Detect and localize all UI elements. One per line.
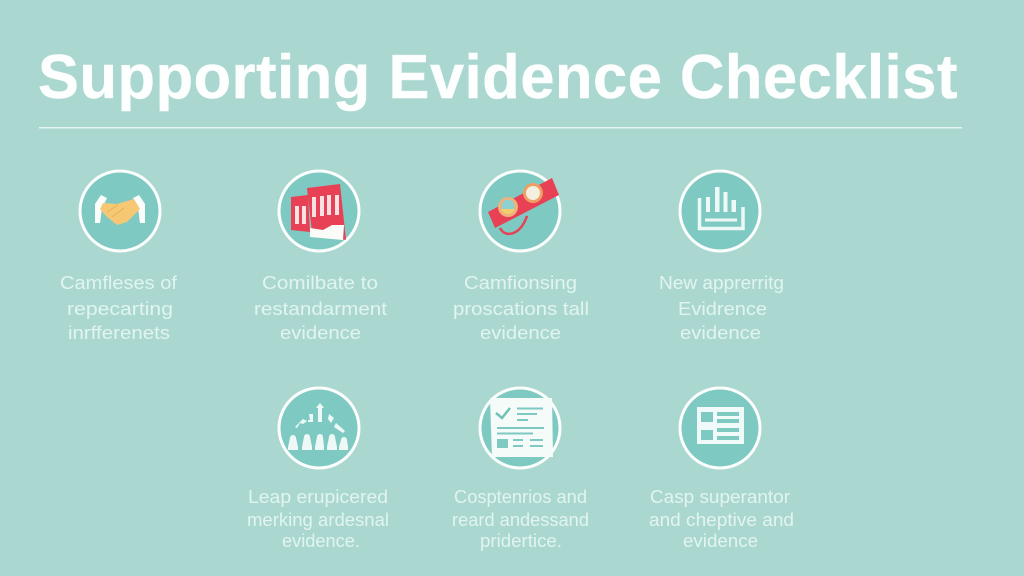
item 4: bar chart (659, 171, 784, 343)
label: item 6: pridertice. (480, 531, 562, 551)
label: item 6 (452, 487, 589, 551)
label: item 5: evidence. (282, 531, 360, 551)
label: item 2: evidence (280, 323, 361, 343)
label: item 3: Camfionsing (464, 273, 577, 293)
label: item 3: evidence (480, 323, 561, 343)
label: item 5 (247, 487, 389, 551)
title: Supporting Evidence Checklist (38, 43, 958, 112)
label: item 4: Evidrence (678, 299, 767, 319)
icon: checklist document (480, 388, 560, 468)
label: item 3 (453, 273, 589, 343)
item 5: people and arrow (247, 388, 389, 551)
icon: bar chart (680, 171, 760, 251)
label: item 7: Casp superantor (650, 487, 790, 507)
label: item 7: evidence (683, 531, 758, 551)
label: item 2: restandarment (254, 299, 387, 319)
label: item 5: merking ardesnal (247, 510, 389, 530)
icon: table (680, 388, 760, 468)
label: item 1 (60, 273, 178, 343)
label: item 3: proscations tall (453, 299, 589, 319)
icon: people (279, 388, 359, 468)
item 3: red glasses band (453, 171, 589, 343)
icon: red documents (279, 171, 359, 251)
item 6: checklist document (452, 388, 589, 551)
icon: red glasses band (480, 171, 560, 251)
label: item 6: Cosptenrios and (454, 487, 587, 507)
label: item 2 (254, 273, 387, 343)
label: item 1: repecarting (67, 299, 173, 319)
label: item 4: New apprerritg (659, 273, 784, 293)
item 2: red documents (254, 171, 387, 343)
item 1: handshake (60, 171, 178, 343)
label: item 4: evidence (680, 323, 761, 343)
icon: handshake (80, 171, 160, 251)
label: item 6: reard andessand (452, 510, 589, 530)
label: item 4 (659, 273, 784, 343)
label: item 2: Comilbate to (262, 273, 378, 293)
label: item 5: Leap erupicered (248, 487, 388, 507)
item 7: table (649, 388, 794, 551)
label: item 7: and cheptive and (649, 510, 794, 530)
label: item 1: Camfleses of (60, 273, 178, 293)
label: item 1: inrfferenets (68, 323, 170, 343)
label: item 7 (649, 487, 794, 551)
